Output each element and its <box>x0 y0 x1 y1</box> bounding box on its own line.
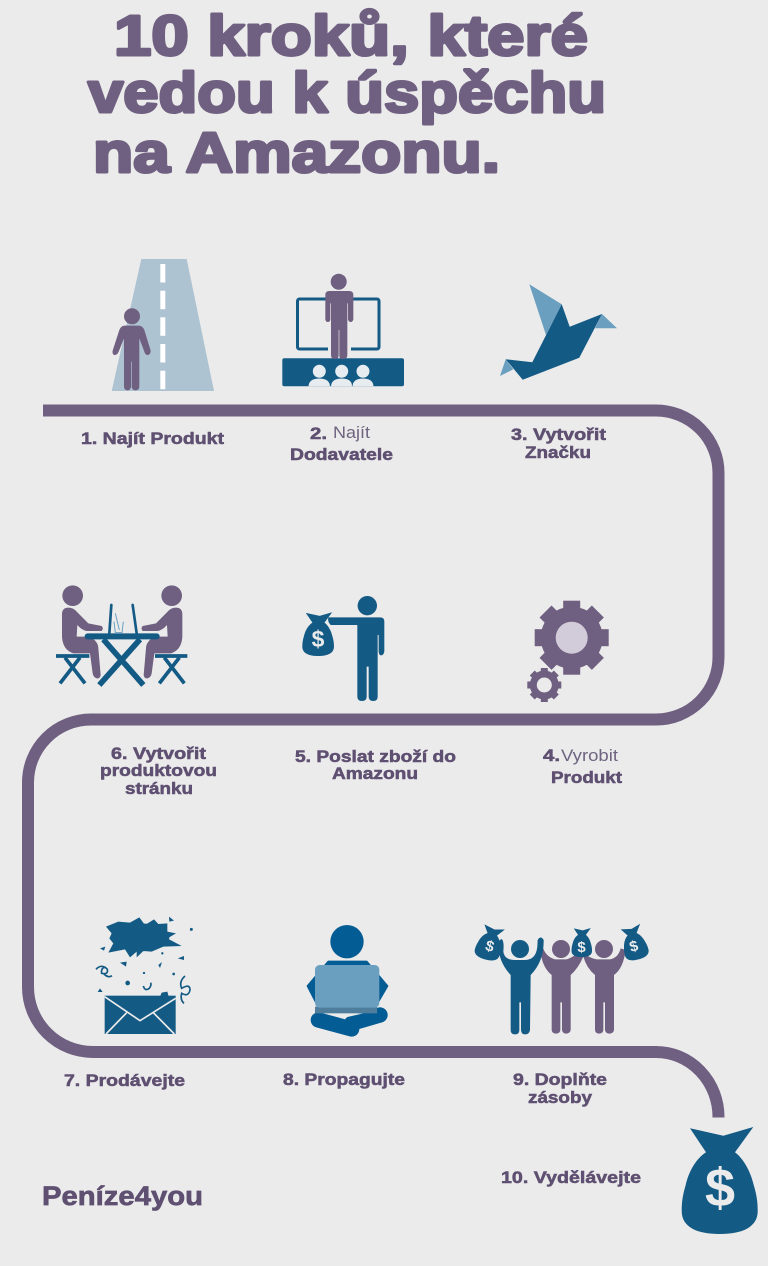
label: step 4: 4. <box>543 746 560 765</box>
icon: three people with money bags: $ <box>483 937 497 956</box>
icon: road with person <box>112 259 214 391</box>
icon: origami bird <box>500 284 617 380</box>
icon: person with money bag <box>302 596 384 701</box>
label: step 6: 6. Vytvořit <box>111 744 206 763</box>
label: step 5: Amazonu <box>332 764 418 783</box>
label: step 5 <box>295 747 456 783</box>
icon: person with money bag: $ <box>312 626 325 652</box>
icon: person with laptop <box>308 925 387 1029</box>
label: step 3: 3. Vytvořit <box>511 425 606 444</box>
title: vedou k úspěchu <box>88 61 606 125</box>
title <box>88 4 606 185</box>
icon: two people at table <box>56 585 187 685</box>
label: step 4: Produkt <box>551 768 622 787</box>
icon: three people with money bags: $ <box>628 937 641 956</box>
title: 10 kroků, které <box>114 4 588 68</box>
icon: three people with money bags: $ <box>577 939 586 956</box>
brand name: Peníze4you <box>42 1181 203 1211</box>
title: na Amazonu. <box>93 121 500 185</box>
label: step 9 <box>513 1070 607 1107</box>
label: step 4: Vyrobit <box>561 746 618 765</box>
icon: gears <box>527 601 609 702</box>
label: step 1: 1. Najít Produkt <box>81 429 224 448</box>
label: step 9: 9. Doplňte <box>513 1070 607 1089</box>
label: step 2: Najít <box>333 423 370 442</box>
label: step 5: 5. Poslat zboží do <box>295 747 456 766</box>
label: step 4 <box>543 746 622 787</box>
label: step 8: 8. Propagujte <box>283 1070 405 1089</box>
icon: large money bag: $ <box>705 1158 735 1218</box>
label: step 6: stránku <box>125 779 193 798</box>
label: step 2: 2. <box>310 424 327 443</box>
icon: presenter on stage <box>282 274 404 386</box>
label: step 10: 10. Vydělávejte <box>501 1168 641 1187</box>
label: step 3 <box>511 425 606 462</box>
label: step 7: 7. Prodávejte <box>64 1071 185 1090</box>
label: step 9: zásoby <box>528 1088 593 1107</box>
label: step 2: Dodavatele <box>290 445 393 464</box>
winding path <box>28 410 719 1118</box>
icon: exploding envelope <box>96 917 193 1034</box>
icon: large money bag <box>682 1127 758 1234</box>
label: step 6: produktovou <box>100 761 217 780</box>
icon: three people with money bags <box>473 923 650 1034</box>
label: step 2 <box>290 423 393 464</box>
label: step 3: Značku <box>525 443 591 462</box>
label: step 6 <box>100 744 217 798</box>
